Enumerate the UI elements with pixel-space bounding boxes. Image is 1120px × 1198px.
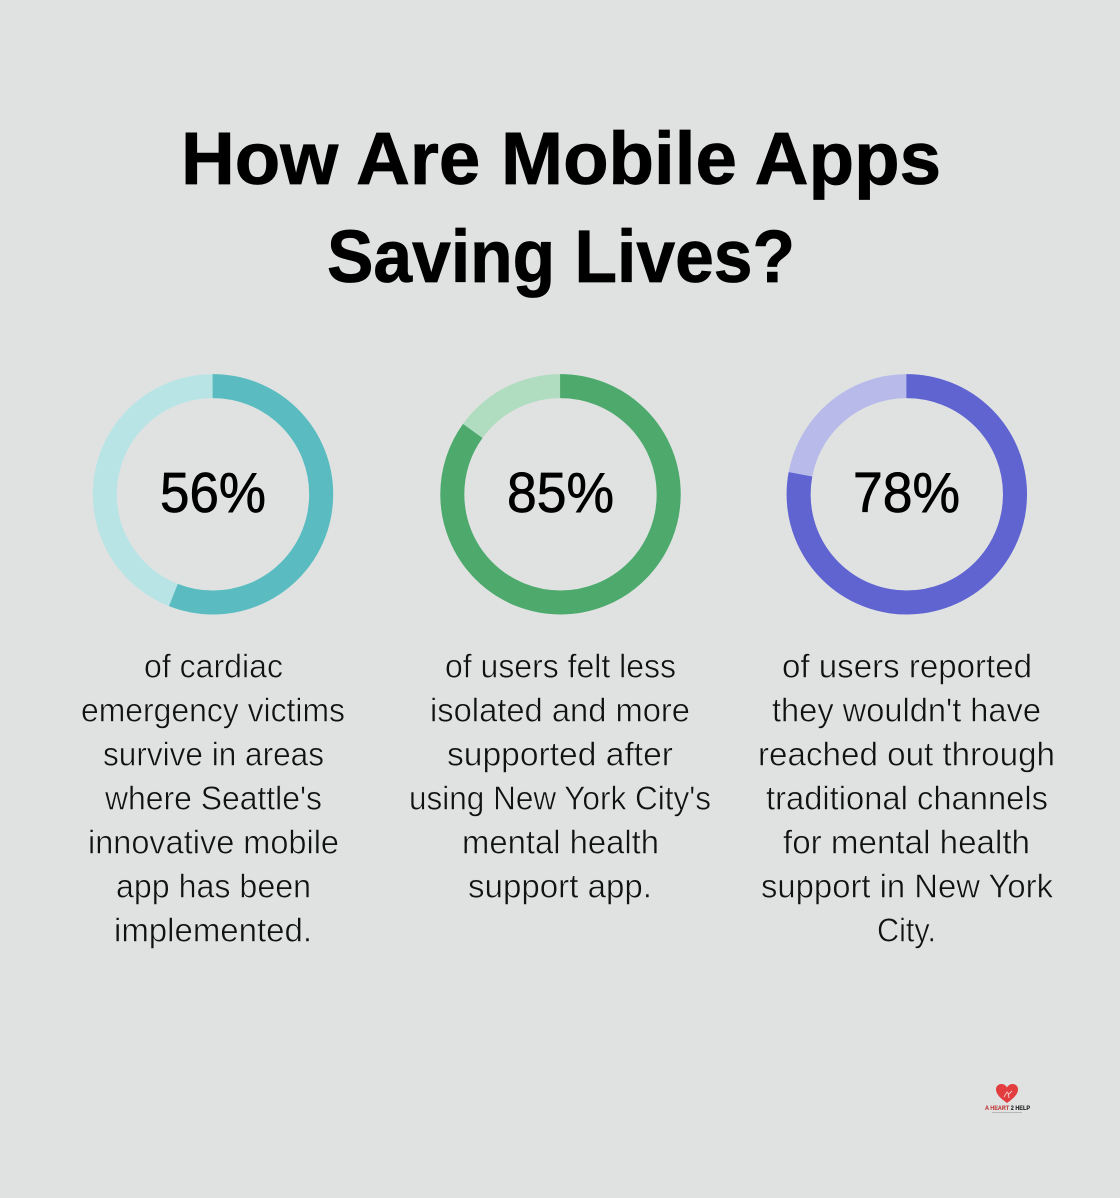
panel: outreach (758, 386, 1055, 948)
donut chart: 85% (452, 386, 669, 602)
text block: isolation description: support app. (468, 867, 652, 904)
text block: outreach description: City. (877, 911, 936, 948)
text block: isolation description: supported after (447, 735, 673, 772)
text block: isolation description: mental health (462, 823, 659, 860)
text block: outreach description (758, 647, 1055, 948)
text block: cardiac description: implemented. (114, 911, 312, 948)
text block: cardiac description: where Seattle's (104, 779, 322, 816)
text block: isolation description (409, 647, 711, 904)
text block: cardiac description: innovative mobile (88, 823, 339, 860)
text block: cardiac description (81, 647, 345, 948)
text block: outreach description: support in New York (761, 867, 1053, 904)
text block: isolation description: isolated and more (430, 691, 690, 728)
text block: outreach description: of users reported (782, 647, 1032, 684)
donut chart: 85%: 85% (507, 461, 614, 525)
text block: cardiac description: emergency victims (81, 691, 345, 728)
text block: outreach description: traditional channels (766, 779, 1048, 816)
text block: outreach description: they wouldn't have (772, 691, 1041, 728)
icon: heart (996, 1084, 1018, 1103)
text block: isolation description: using New York City's (409, 779, 711, 816)
donut chart: 56%: 56% (160, 461, 266, 525)
logo: A Heart 2 Help (985, 1084, 1030, 1113)
text block: cardiac description: app has been (116, 867, 311, 904)
text block: outreach description: for mental health (783, 823, 1030, 860)
donut chart: 78% (799, 386, 1015, 602)
text block: cardiac description: of cardiac (144, 647, 283, 684)
title (181, 117, 941, 298)
panel: cardiac emergency survival (81, 386, 345, 948)
donut chart: 56% (105, 386, 321, 602)
text block: isolation description: of users felt less (445, 647, 676, 684)
text block: cardiac description: survive in areas (103, 735, 324, 772)
donut chart: 78%: 78% (853, 461, 960, 525)
logo: A Heart 2 Help: A HEART 2 HELP (985, 1106, 1030, 1112)
title: Saving Lives? (327, 215, 795, 298)
text block: outreach description: reached out through (758, 735, 1055, 772)
title: How Are Mobile Apps (181, 117, 941, 200)
panel: isolation support (409, 386, 711, 904)
